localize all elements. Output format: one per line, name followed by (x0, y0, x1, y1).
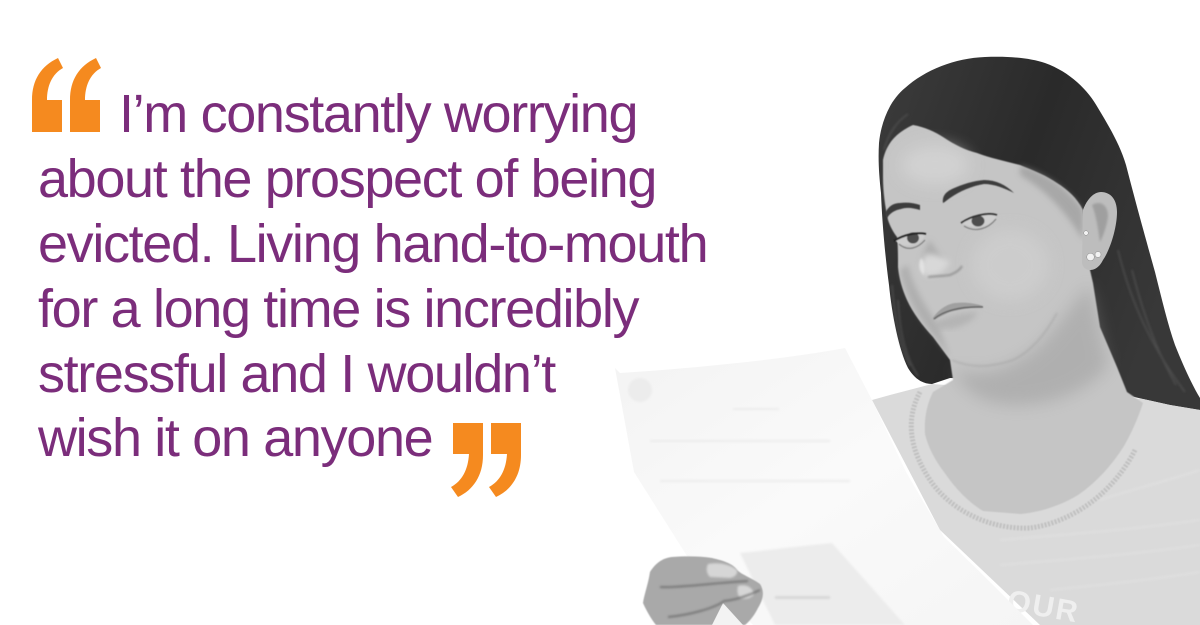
eyes (894, 214, 997, 248)
hair highlights (884, 114, 1185, 392)
quote text: about the prospect of being (38, 149, 656, 209)
letter paper (615, 348, 1033, 625)
mouth (933, 303, 983, 329)
jaw line (952, 313, 1057, 366)
quote text: stressful and I wouldn’t (38, 344, 556, 404)
nose (919, 240, 962, 277)
quote text: for a long time is incredibly (38, 279, 639, 339)
ear (1082, 192, 1117, 270)
lower paper shade (740, 543, 905, 625)
cheek highlight (972, 230, 1048, 300)
quote text: wish it on anyone (37, 408, 432, 468)
opening quotation mark (32, 58, 101, 132)
gap below fingers (712, 603, 743, 625)
paper printed details (628, 378, 850, 599)
hair shadow on temple (1020, 165, 1083, 240)
finger shadows (660, 581, 760, 617)
t-shirt (872, 384, 1200, 625)
eyebrows (885, 180, 1014, 218)
shirt collar (911, 392, 1135, 528)
photo: woman reading a letter (615, 57, 1200, 625)
earrings (1084, 231, 1101, 261)
left cheek shading (900, 265, 950, 358)
skin: face and neck (883, 125, 1143, 514)
hair (879, 57, 1200, 410)
quote text: I’m constantly worrying (119, 84, 637, 144)
shirt stripes (1000, 470, 1200, 590)
quote text: evicted. Living hand-to-mouth (38, 214, 707, 274)
hand holding paper (643, 556, 763, 625)
fingernails (707, 563, 754, 599)
neck shadow under jaw (953, 285, 1108, 405)
quote text (37, 84, 707, 468)
forehead highlight (901, 145, 969, 185)
closing quotation mark (451, 423, 521, 497)
